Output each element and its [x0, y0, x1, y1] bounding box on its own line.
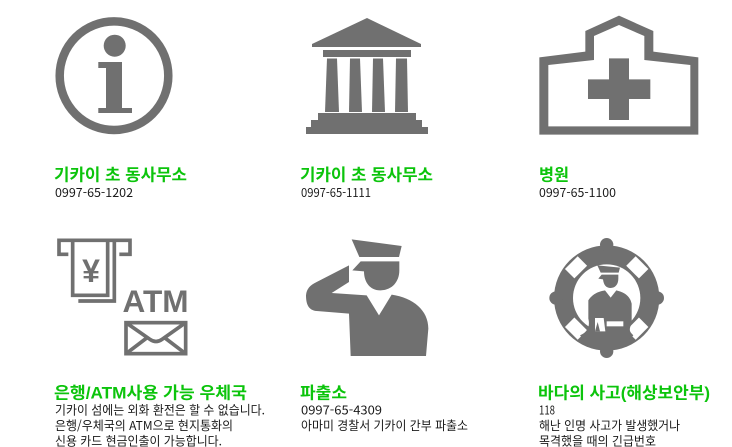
- icon: bank building: [306, 18, 428, 134]
- text: bank ATM post office: 기카이 섬에는 외화 환전은 할 수 없습니다.: [55, 400, 265, 418]
- icon: hospital: [539, 16, 698, 135]
- text: police box: 0997-65-4309: [301, 400, 382, 418]
- text: village office 1: 기카이 초 동사무소: [54, 166, 187, 184]
- text: bank ATM post office: [54, 382, 265, 447]
- icon: ATM and post: ¥: [82, 253, 100, 289]
- text: police box: 아마미 경찰서 기카이 간부 파출소: [301, 416, 468, 434]
- text: sea accident coast guard: 바다의 사고(해상보안부): [538, 384, 710, 402]
- text: hospital: 0997-65-1100: [539, 183, 616, 201]
- text: village office 1: 0997-65-1202: [55, 183, 133, 201]
- text: sea accident coast guard: 해난 인명 사고가 발생했거나: [539, 416, 680, 434]
- icon: lifebuoy with coast guard: [549, 238, 664, 358]
- text: hospital: 병원: [539, 166, 569, 184]
- text: bank ATM post office: 은행/ATM사용 가능 우체국: [54, 382, 247, 402]
- icon: ATM and post: [59, 240, 188, 354]
- text: village office 2: [300, 166, 433, 201]
- text: village office 2: 기카이 초 동사무소: [300, 166, 433, 184]
- text: police box: [300, 384, 468, 434]
- text: village office 2: 0997-65-1111: [301, 183, 371, 201]
- text: sea accident coast guard: 118: [539, 400, 555, 418]
- text: police box: 파출소: [300, 384, 347, 402]
- text: village office 1: [54, 166, 187, 201]
- icon: information: [60, 21, 168, 130]
- icon: saluting police officer: [306, 239, 428, 356]
- text: sea accident coast guard: [538, 384, 710, 447]
- text: hospital: [539, 166, 616, 201]
- icon: ATM and post: ATM: [122, 283, 188, 319]
- text: bank ATM post office: 은행/우체국의 ATM으로 현지통화의: [55, 416, 233, 434]
